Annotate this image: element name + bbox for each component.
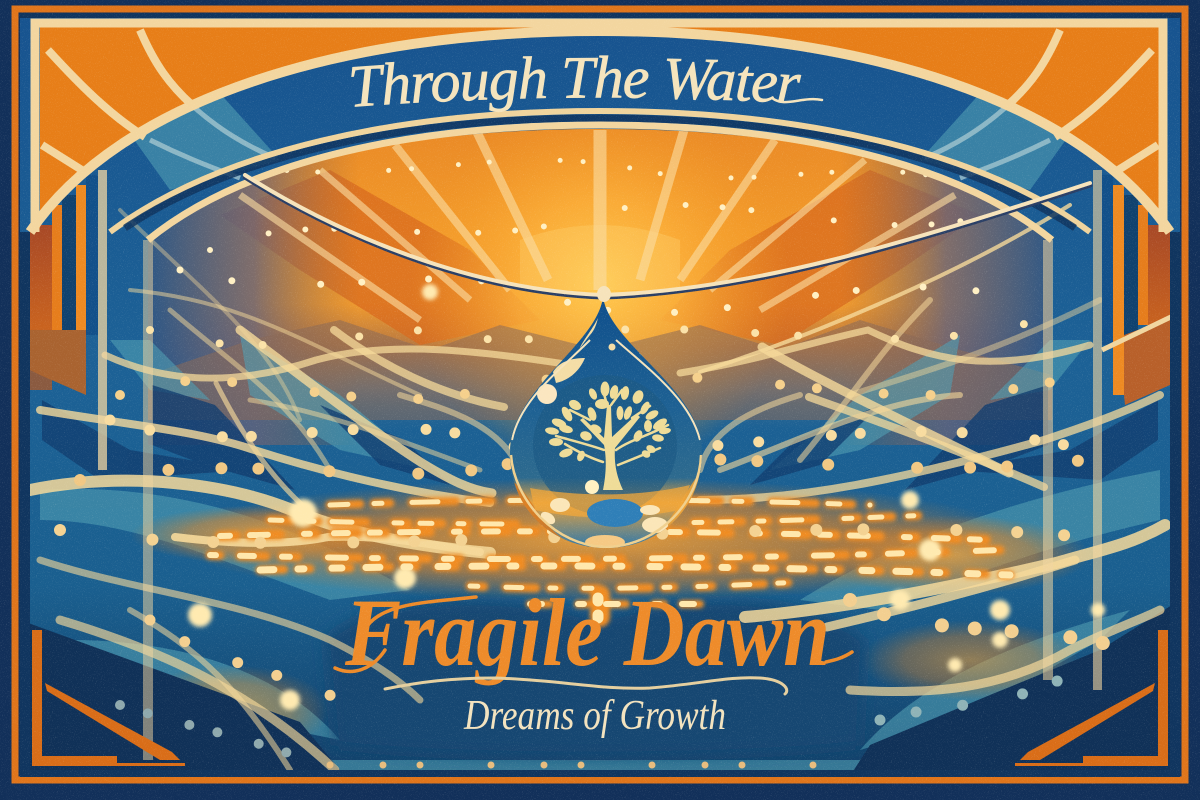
hexagon frame verticals: [98, 170, 1102, 760]
arch title: Through The Water: [351, 55, 802, 112]
amber glow on water: [170, 478, 1030, 602]
drop clasp: [597, 286, 611, 302]
panel: orange arch spandrels: [30, 27, 1170, 232]
drop reflections: [510, 318, 702, 549]
corner bracket bottom right: [1015, 630, 1168, 766]
side pillars right: [1102, 175, 1175, 405]
headline swashes: [335, 597, 852, 671]
water drop with tree: [510, 286, 702, 549]
dark navy lower corners: [30, 624, 340, 770]
title swashes: [772, 98, 822, 102]
floating sparkle dots: [60, 160, 1140, 765]
subtitle: Dreams of Growth: Dreams of Growth: [463, 693, 726, 739]
woven light ribbons: [30, 205, 1165, 770]
navy pool behind the headline: [325, 601, 865, 756]
side pillars left: [30, 175, 98, 395]
spandrel strokes: [42, 30, 1158, 172]
arch outer band: [30, 31, 1170, 232]
arch inner double band: [110, 111, 1090, 232]
rope: [245, 175, 1090, 297]
panel: sunrise sky: [148, 129, 1052, 446]
drop body: [510, 297, 702, 548]
corner bracket bottom left: [32, 630, 185, 766]
ornamental divider: [385, 678, 787, 694]
spandrel strokes continuing over blue: [150, 108, 1050, 178]
headline: Fragile Dawn: Fragile Dawn: [344, 579, 830, 686]
water lights: [210, 500, 1010, 625]
tree leaves: [544, 382, 671, 462]
big glowing orbs: [188, 284, 1105, 710]
sun rays: [240, 130, 955, 320]
icon: tree: [544, 382, 671, 490]
